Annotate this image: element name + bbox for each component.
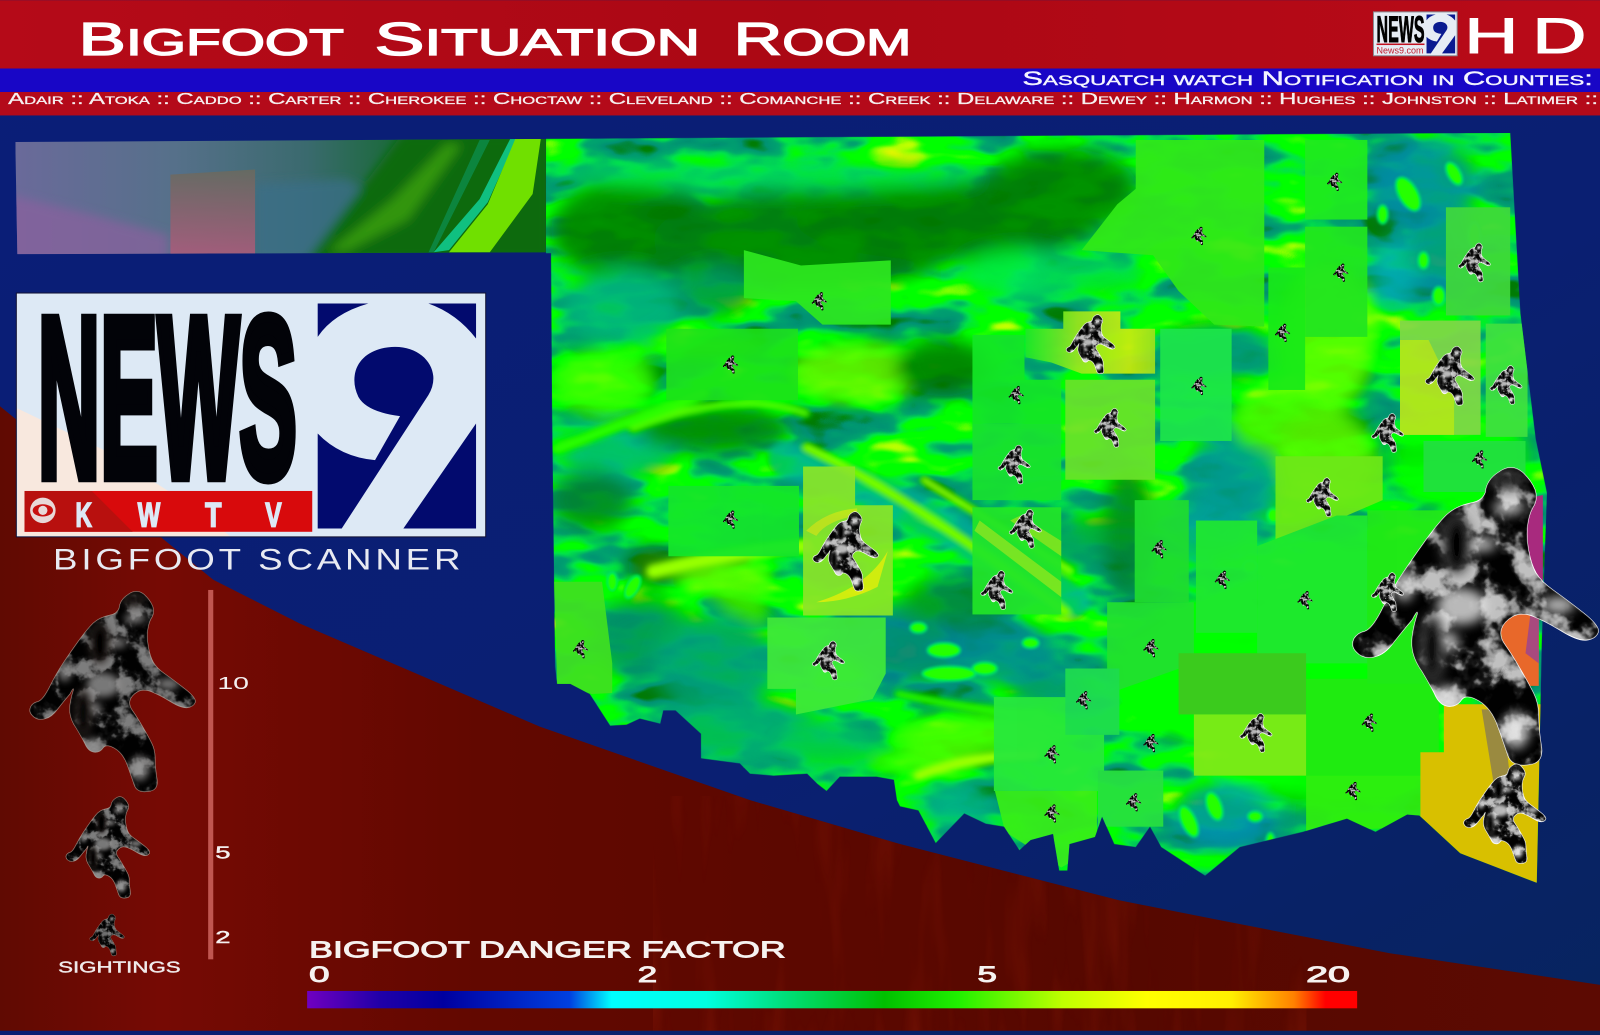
marker (1076, 691, 1092, 710)
marker (1065, 313, 1116, 375)
marker (573, 640, 589, 659)
legend: sightings scale (27, 587, 249, 977)
marker (723, 355, 739, 374)
marker (1333, 263, 1349, 282)
Bigfoot Scanner label: BIGFOOT SCANNER (53, 544, 464, 577)
marker (1044, 745, 1060, 764)
marker (998, 444, 1031, 485)
scale heading: BIGFOOT DANGER FACTOR (309, 936, 786, 962)
marker (723, 510, 739, 529)
larger bigfoot sighting markers (812, 242, 1523, 753)
marker (1458, 242, 1491, 283)
red lower-left wedge (0, 406, 1600, 1031)
county list: Adair :: Atoka :: Caddo :: Carter :: Cherokee :: Choctaw :: Cleveland :: Comanche :: Creek :: Delaware :: Dewey :: Harmon :: Hughes :: Johnston :: Latimer :: (8, 91, 1598, 108)
marker (1044, 804, 1060, 823)
notification heading: Sasquatch watch Notification in Counties: (1022, 68, 1593, 90)
KWTV red bar: K (76, 497, 92, 535)
marker (1143, 733, 1159, 753)
marker (1143, 639, 1159, 658)
small News 9 logo: NEWS (1377, 9, 1424, 50)
marker (1191, 376, 1207, 396)
title: S ITUATION (374, 13, 700, 65)
panhandle of the map (16, 139, 546, 254)
scale value 20: 20 (1306, 962, 1350, 987)
marker (1191, 226, 1207, 246)
navy numeral 9 (318, 303, 476, 529)
legend caption: SIGHTINGS (58, 960, 181, 977)
danger factor colour scale (307, 936, 1357, 1008)
HD mark: HD (1464, 8, 1600, 64)
marker (1009, 509, 1042, 549)
bottom-right bigfoot (1462, 762, 1548, 866)
marker (980, 570, 1014, 610)
county overlays (554, 140, 1528, 868)
marker (1327, 172, 1343, 191)
river ribbons (556, 393, 1071, 776)
legend value 10: 10 (217, 673, 249, 693)
News 9 KWTV logo (16, 271, 486, 537)
marker (811, 292, 827, 311)
scale value 2: 2 (638, 962, 657, 987)
legend scale bar (208, 590, 213, 959)
marker (1151, 540, 1167, 559)
south-east high danger zones (1420, 495, 1543, 888)
marker (1361, 713, 1377, 732)
marker (1094, 408, 1127, 448)
marker (1472, 450, 1488, 469)
lime contour spots (607, 160, 1481, 851)
marker (1275, 323, 1291, 343)
marker (1126, 793, 1142, 812)
marker (1345, 781, 1361, 801)
KWTV red bar: V (265, 497, 282, 535)
blue notification band (0, 69, 1600, 92)
title: B IGFOOT (79, 13, 344, 65)
marker (1489, 365, 1523, 405)
marker over giant bigfoot arm (1371, 572, 1404, 612)
legend bigfoot 5 (64, 794, 152, 900)
News 9 KWTV logo: NEWS (38, 271, 297, 526)
small News 9 logo (1373, 9, 1457, 56)
scale value 0: 0 (309, 962, 330, 987)
marker (1214, 570, 1230, 589)
colour ramp (307, 991, 1357, 1008)
giant bigfoot (1348, 460, 1600, 773)
legend value 5: 5 (215, 842, 231, 862)
KWTV red bar: W (138, 497, 160, 535)
marker (812, 640, 845, 681)
legend bigfoot 10 (27, 587, 200, 797)
map surface with danger colours (541, 128, 1561, 893)
red county band (0, 92, 1600, 115)
marker (1239, 713, 1273, 753)
marker (1297, 591, 1313, 610)
title (79, 13, 911, 65)
small News 9 logo: News9.com (1377, 46, 1423, 56)
panel: map of Oklahoma danger factor (5, 128, 1600, 893)
marker (1425, 345, 1475, 407)
logo plate (16, 293, 486, 537)
marker (1008, 385, 1024, 405)
bigfoot sighting markers (573, 172, 1488, 823)
scale value 5: 5 (978, 962, 997, 987)
red title band (0, 0, 1600, 69)
marker (1371, 413, 1404, 453)
marker (1306, 477, 1339, 517)
KWTV red bar: T (205, 497, 221, 535)
legend value 2: 2 (215, 927, 231, 947)
icon: CBS eye (30, 498, 56, 523)
header bar (0, 0, 1600, 115)
KWTV red bar (24, 491, 312, 535)
marker (812, 510, 880, 593)
title: R OOM (734, 13, 911, 65)
legend bigfoot 2 (89, 913, 125, 957)
